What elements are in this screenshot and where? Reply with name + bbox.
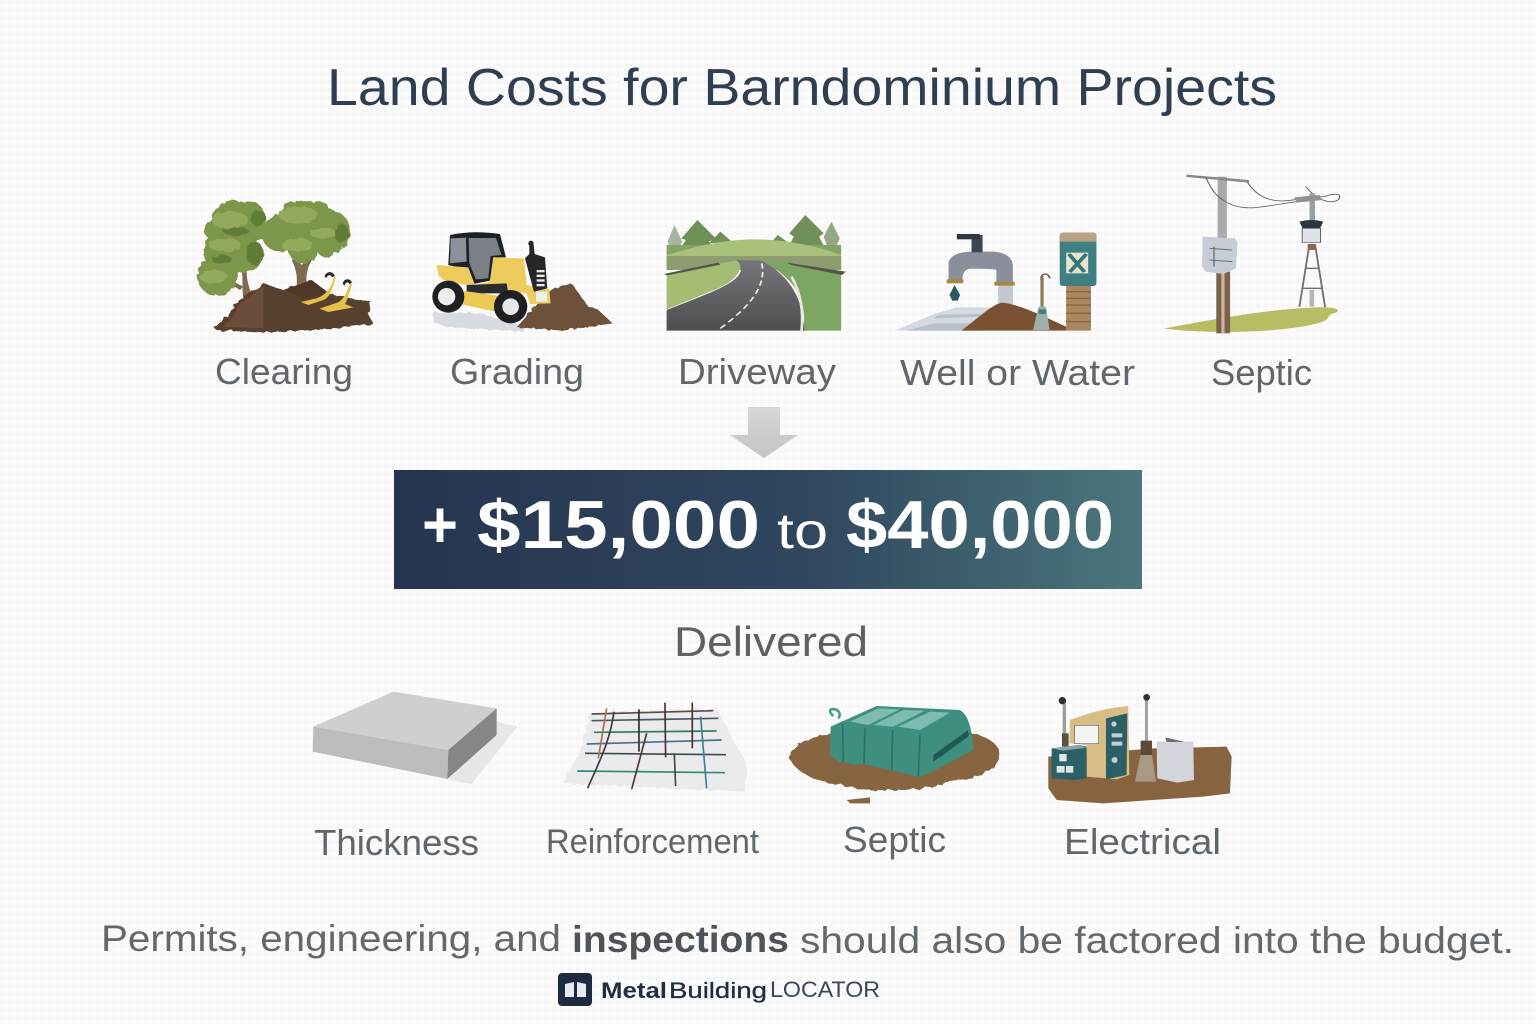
banner: cost range: + bbox=[422, 487, 458, 561]
footnote: Permits, engineering, and bbox=[101, 918, 561, 959]
icon: reinforcement mesh bbox=[563, 703, 747, 792]
banner: cost range: $15,000 bbox=[477, 487, 760, 563]
banner: cost range: to bbox=[777, 503, 828, 559]
label: Septic (delivered): Septic bbox=[843, 819, 946, 860]
icon: utility poles bbox=[1163, 175, 1340, 333]
icon: driveway bbox=[664, 215, 846, 331]
logo: MetalBuildingLocator: Metal bbox=[601, 978, 667, 1003]
label: Thickness: Thickness bbox=[314, 822, 479, 863]
label: Driveway: Driveway bbox=[678, 351, 836, 392]
label: Well or Water: Well or Water bbox=[900, 352, 1135, 393]
label: Electrical: Electrical bbox=[1064, 821, 1221, 862]
banner: cost range bbox=[394, 470, 1142, 589]
logo: MetalBuildingLocator: Building bbox=[669, 978, 767, 1003]
logo: MetalBuildingLocator: LOCATOR bbox=[770, 977, 880, 1002]
icon: grading bulldozer bbox=[432, 232, 613, 332]
icon: septic tank bbox=[788, 706, 999, 803]
logo: MetalBuildingLocator bbox=[558, 973, 880, 1006]
icon: well or water bbox=[895, 233, 1096, 331]
label: Reinforcement: Reinforcement bbox=[546, 823, 760, 861]
footnote: inspections bbox=[572, 919, 789, 960]
banner: cost range: $40,000 bbox=[846, 487, 1114, 563]
label: Septic: Septic bbox=[1211, 352, 1312, 393]
label: Clearing: Clearing bbox=[215, 351, 353, 392]
footnote: should also be factored into the budget. bbox=[800, 920, 1514, 961]
icon: clearing trees and dirt bbox=[197, 201, 373, 333]
label: Grading: Grading bbox=[450, 351, 584, 392]
subheading: Delivered: Delivered bbox=[674, 618, 868, 665]
icon: electrical equipment bbox=[1048, 694, 1232, 803]
icon: concrete slab bbox=[313, 692, 518, 784]
footnote bbox=[101, 918, 1514, 961]
title: Land Costs for Barndominium Projects bbox=[327, 59, 1277, 117]
arrow: down bbox=[730, 407, 798, 458]
